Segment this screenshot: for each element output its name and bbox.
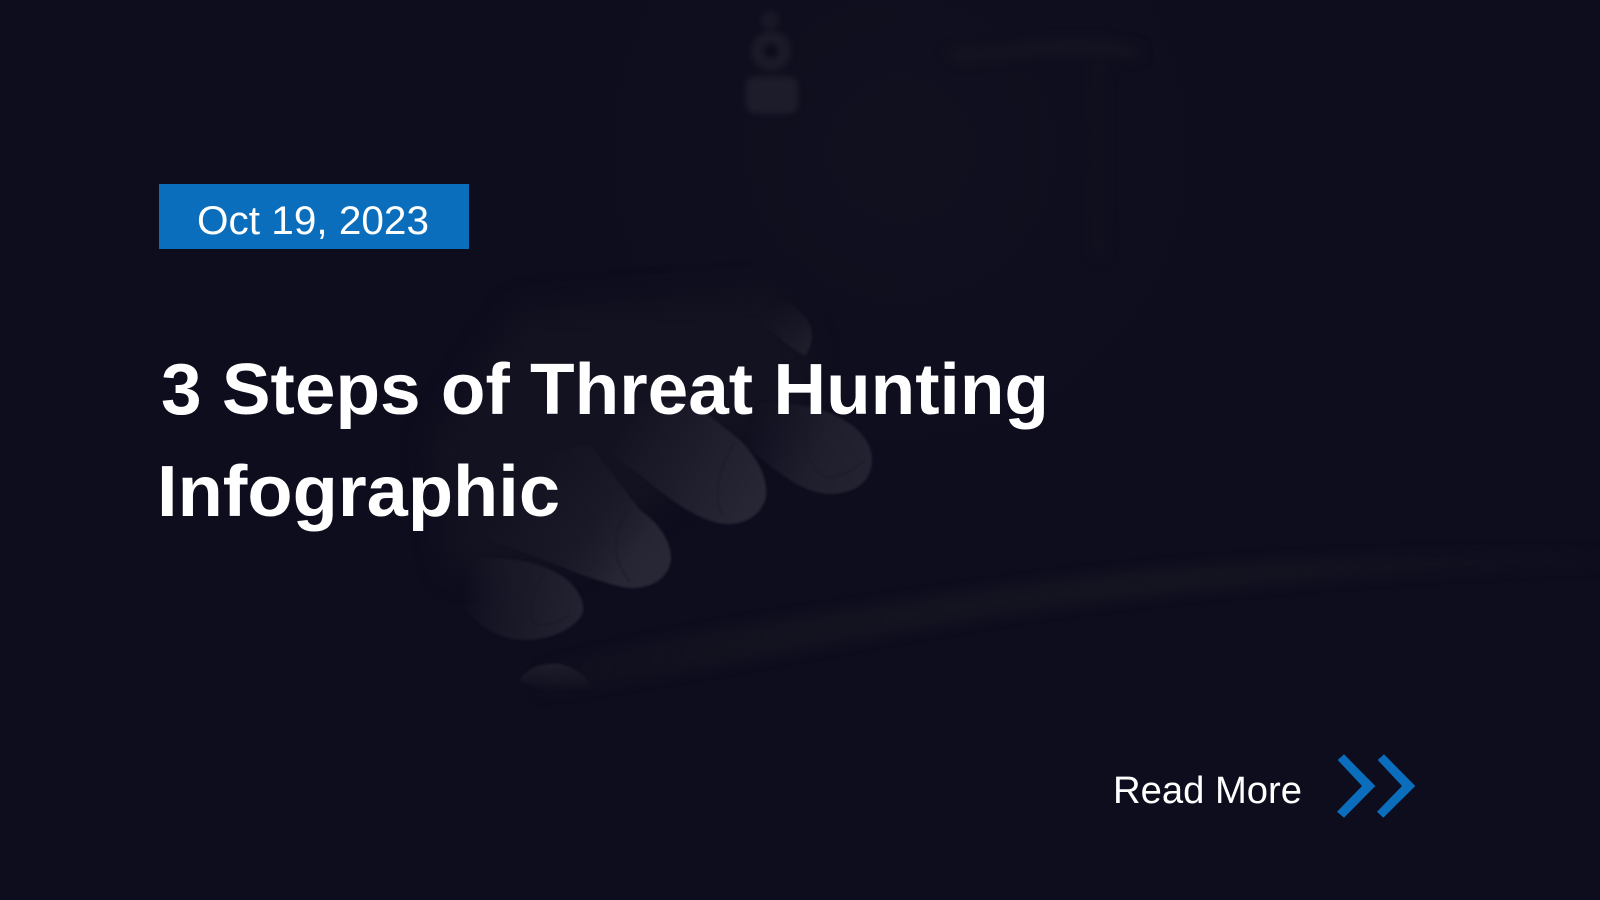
icon: double chevron arrow — [1337, 754, 1415, 818]
hand: index finger — [745, 400, 872, 494]
hand: palm shadow — [430, 290, 810, 570]
read more link: Read More — [1113, 770, 1302, 812]
read more link — [1113, 754, 1415, 818]
title: Infographic — [157, 452, 560, 532]
background photo: keyboard edge — [540, 554, 1600, 695]
hand: ring finger — [440, 445, 671, 588]
background photo: blurred objects at top — [570, 0, 1230, 480]
date badge — [159, 184, 469, 249]
hand: reflection — [520, 664, 592, 693]
date badge: Oct 19, 2023 — [197, 199, 429, 243]
hand: middle finger — [580, 400, 766, 524]
hand: little finger — [460, 558, 583, 640]
background photo: hand — [430, 290, 872, 693]
title: 3 Steps of Threat Hunting — [161, 350, 1049, 430]
hand: upper fingertip — [750, 290, 812, 356]
title — [157, 350, 1049, 532]
